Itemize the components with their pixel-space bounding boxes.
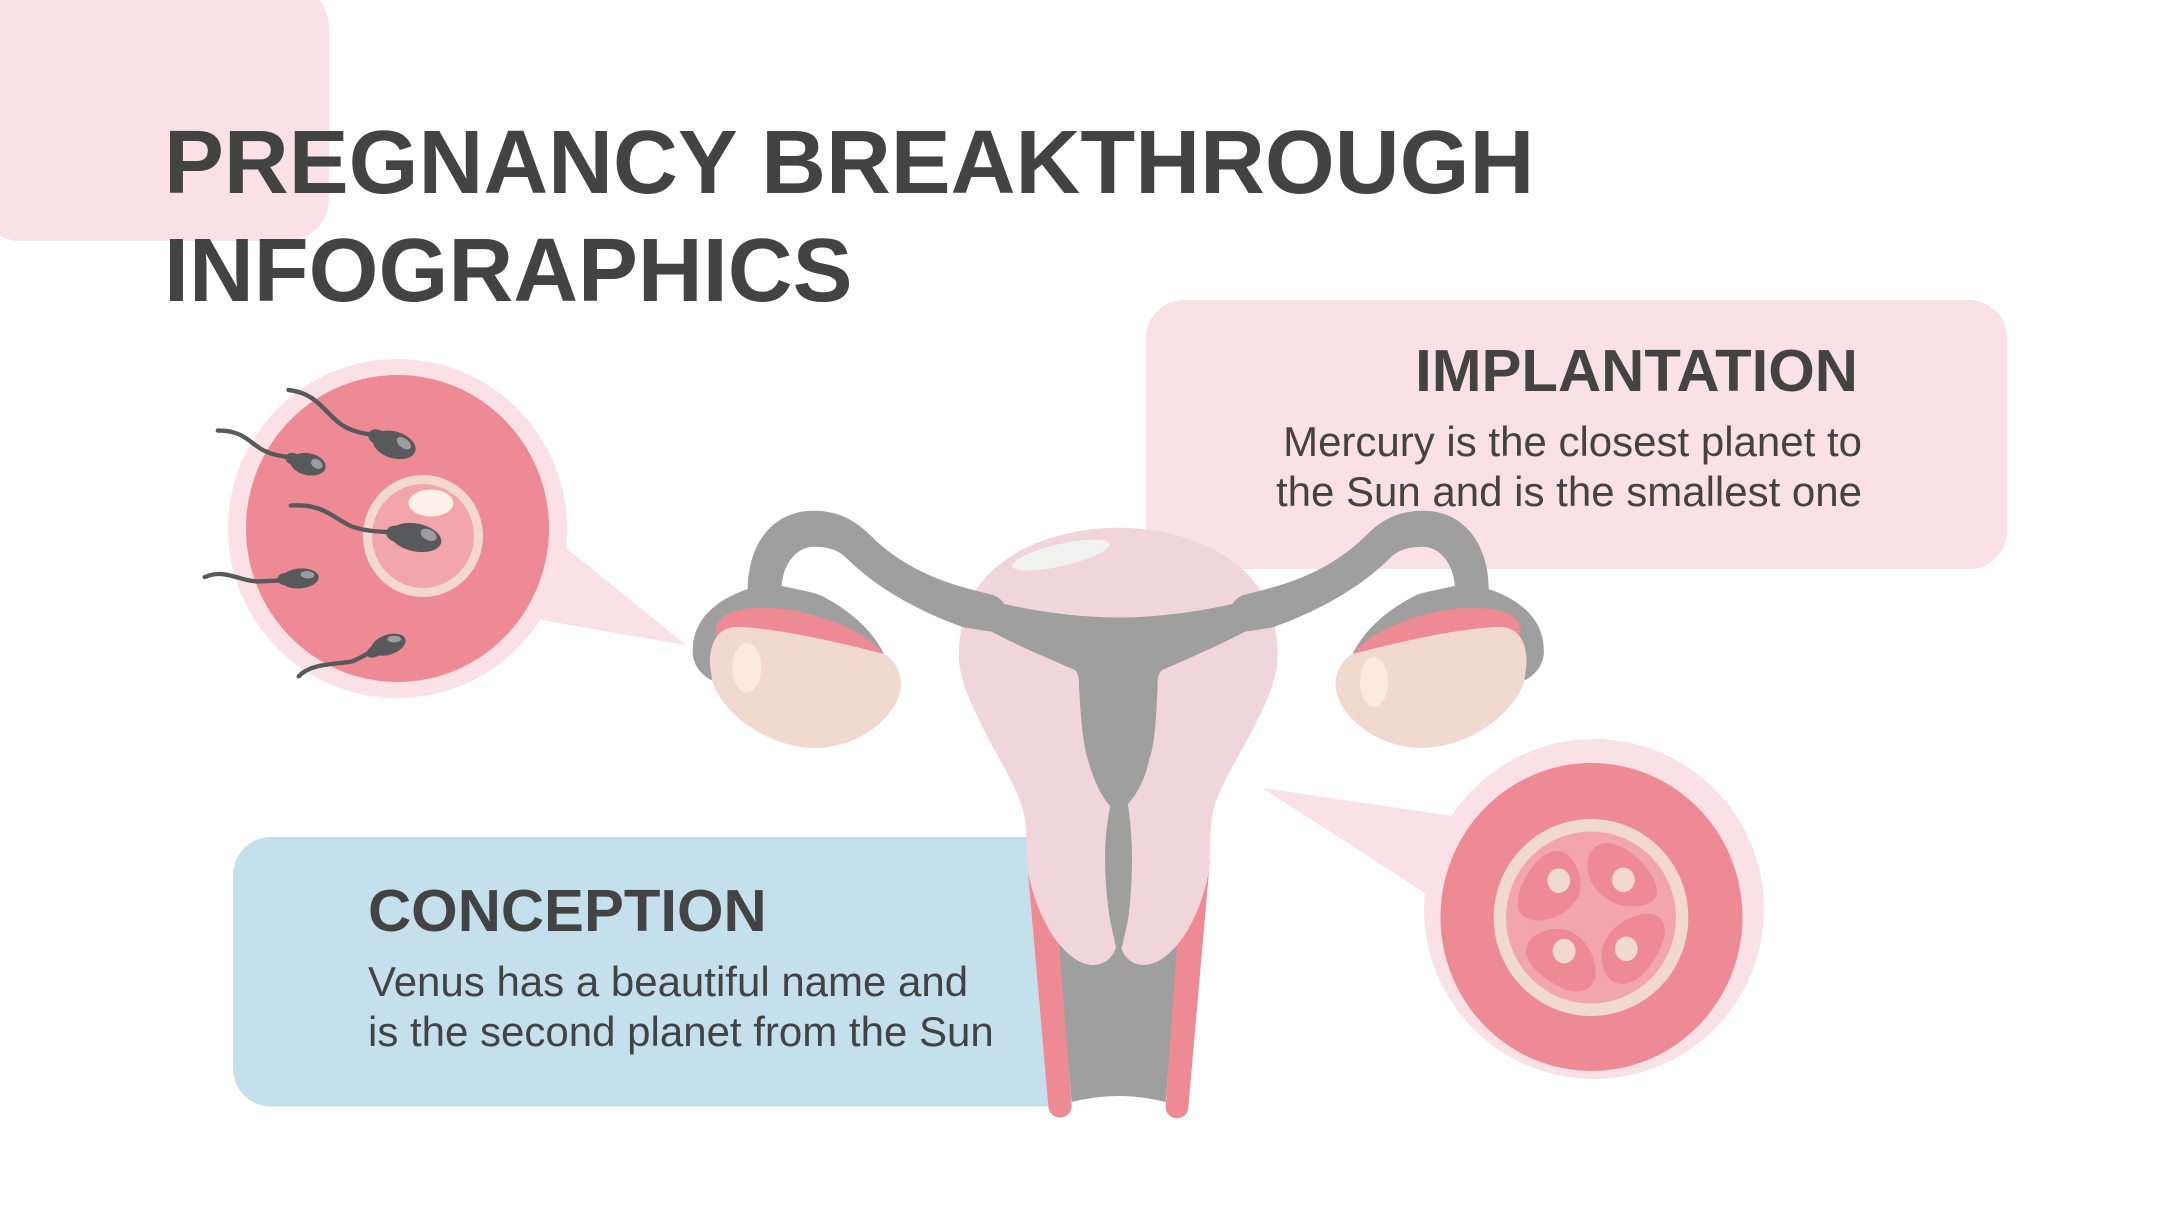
icon: dividing cells [1494, 819, 1688, 1016]
title: INFOGRAPHICS [164, 221, 852, 321]
vaginal wall right [1166, 860, 1210, 1118]
decorative pink corner panel [0, 0, 329, 241]
vaginal canal [1056, 930, 1180, 1102]
uterus body [959, 528, 1278, 965]
implantation text block [1276, 337, 1862, 515]
icon: egg cell [363, 475, 483, 597]
illustration: uterus with tubes and ovaries [693, 511, 1544, 1118]
vaginal wall left [1027, 860, 1072, 1118]
body: implantation: Mercury is the closest planet to [1283, 418, 1862, 465]
icon: sperm cells [205, 390, 444, 676]
callout pointer [1262, 788, 1452, 893]
body: conception: is the second planet from the Sun [368, 1008, 994, 1055]
panel: conception background [233, 837, 1060, 1106]
callout: blastocyst circle [1262, 739, 1764, 1079]
conception text block [368, 877, 994, 1055]
body: implantation: the Sun and is the smallest one [1276, 468, 1862, 515]
callout pointer [541, 548, 686, 645]
left ovary [693, 586, 901, 748]
title: PREGNANCY BREAKTHROUGH [164, 113, 1534, 213]
callout: fertilization circle [205, 359, 686, 698]
panel: implantation background [1146, 300, 2007, 569]
body: conception: Venus has a beautiful name and [368, 958, 968, 1005]
right ovary [1336, 586, 1544, 748]
uterus highlight [1010, 533, 1112, 577]
fallopian tubes, uterine cavity and cervical canal [748, 511, 1489, 947]
heading: conception: CONCEPTION [368, 877, 767, 944]
heading: implantation: IMPLANTATION [1415, 337, 1858, 404]
